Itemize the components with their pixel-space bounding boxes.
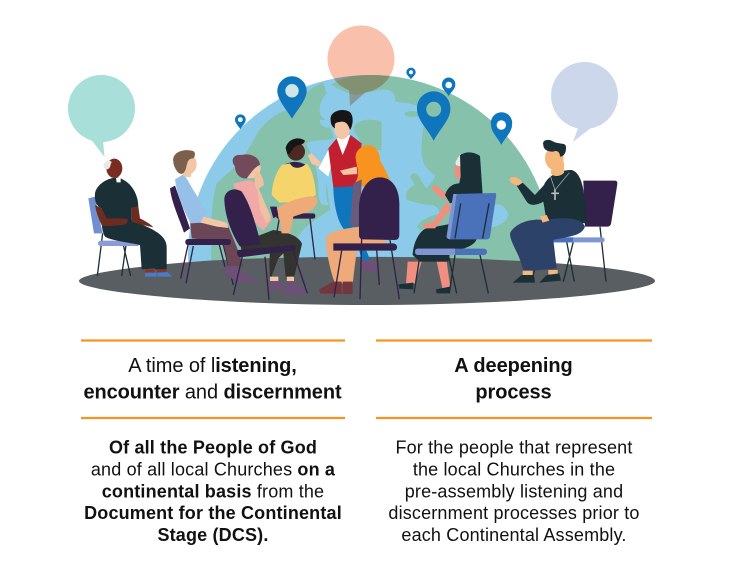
floor shadow: [79, 257, 655, 305]
heading: left column: A time of listening,: [128, 355, 297, 377]
text block: right column: each Continental Assembly.: [401, 525, 627, 545]
person: woman with long black hair on blue chair: [398, 152, 496, 293]
person: priest on blue chair: [88, 159, 172, 277]
text block: right column: For the people that represent: [395, 438, 633, 458]
person: woman with orange hair on purple chair: [319, 145, 399, 299]
figures, left half: [88, 110, 380, 300]
heading: right column: process: [475, 382, 552, 404]
heading: left column: [83, 355, 342, 404]
text block: left column: and of all local Churches on a: [91, 460, 336, 480]
pin: right: [491, 112, 512, 145]
text block: left column: Of all the People of God: [109, 438, 317, 458]
pin: top right: [442, 77, 455, 96]
heading: left column: encounter and discernment: [83, 382, 342, 404]
speech bubble: teal: [68, 75, 135, 157]
person: man with cross necklace: [509, 140, 617, 283]
pin: large left: [277, 76, 307, 119]
illustration: group around a globe: [68, 26, 655, 305]
text block: right column: pre-assembly listening and: [405, 482, 623, 502]
person: woman in pink, seen from behind: [224, 154, 307, 300]
text block: left column: Document for the Continental: [84, 503, 342, 523]
figures, right half: [319, 140, 617, 299]
location pins: [235, 68, 512, 145]
speech bubble: lavender: [551, 62, 618, 142]
heading: right column: [454, 355, 573, 404]
orange rules: [81, 340, 652, 418]
text block: right column: [388, 438, 640, 545]
person: seated man in yellow sweater: [270, 138, 317, 259]
pin: top small: [406, 68, 416, 79]
text block: left column: continental basis from the: [102, 482, 324, 502]
text block: left column: [84, 438, 342, 545]
person: standing man in red vest: [308, 110, 380, 273]
text block: right column: discernment processes prior to: [388, 503, 640, 523]
person: man in light blue shirt: [170, 150, 257, 285]
heading: right column: A deepening: [454, 355, 573, 377]
pin: small left: [235, 114, 246, 129]
text block: left column: Stage (DCS).: [157, 525, 269, 545]
speech bubble: salmon: [328, 26, 394, 106]
globe: [188, 75, 546, 262]
text block: right column: the local Churches in the: [413, 460, 615, 480]
pin: large centre: [417, 91, 450, 141]
